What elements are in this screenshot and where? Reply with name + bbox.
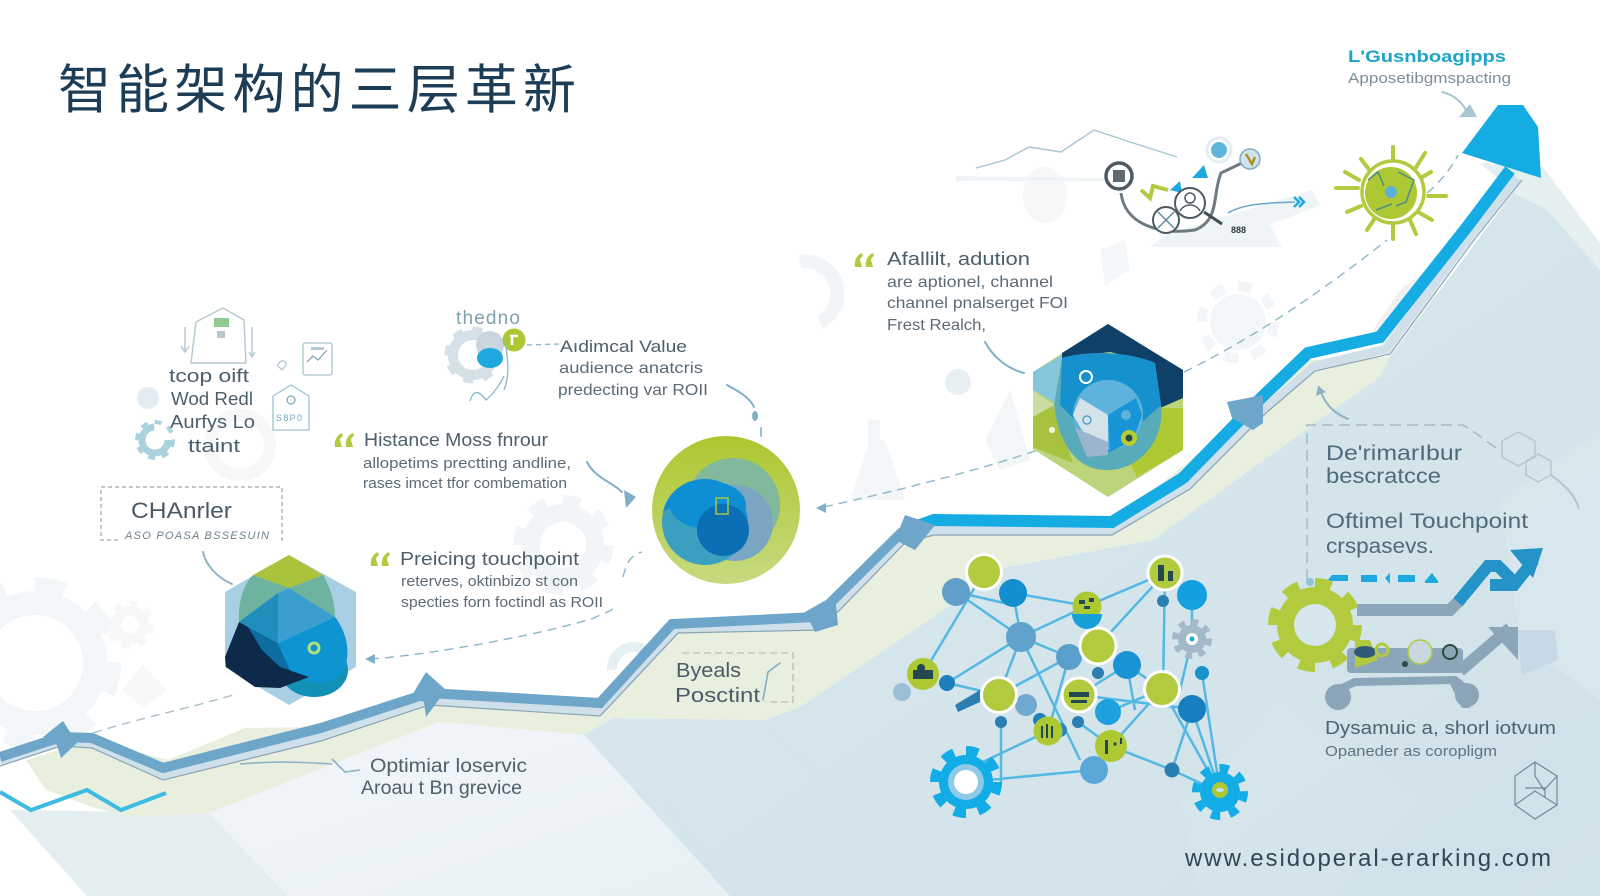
quote block: history: Histance Moss fnrour [364,430,548,450]
quote block: history: allopetims prectting andline, [363,455,571,472]
ghost gears background [0,167,1274,741]
arrow: label to head [1442,92,1477,117]
text block: optimiar: Optimiar loservic [370,756,527,777]
quote block: attribution [855,249,1068,334]
quote block: attribution: Frest Realch, [887,317,986,334]
arrow: audience to circle [727,385,761,436]
icon: hexagon logo [1515,762,1557,819]
text block: dynamic: Dysamuic a, shorl iotvum [1325,718,1556,738]
text block: beyond box: Posctint [675,685,761,707]
arrow: channel to hexagon [203,552,232,584]
gear: small blue [1196,768,1244,816]
quote block: pricing: reterves, oktinbizo st con [401,573,578,590]
left text block: tcop oift [169,366,249,386]
line marker 5 [1227,395,1263,430]
panel: right description: De'rimarIbur [1326,442,1462,465]
quote block: history [335,430,571,492]
left hexagon [225,555,356,705]
text block: audience [558,337,708,399]
title: 智能架构的三层革新 [58,61,576,120]
icon: price document: S8P0 [276,413,302,423]
icon: compass [1153,207,1179,233]
text block: beyond box: Byeals [676,660,741,682]
icon: green virus sun [1336,147,1446,239]
icon: house document [181,308,255,363]
icon: target [1106,163,1132,189]
quote block: pricing: specties forn foctindl as ROII [401,594,603,611]
quote block: attribution: Afallilt, adution [887,249,1030,269]
quote block: pricing: Preicing touchpoint [400,549,579,569]
quote block: attribution: channel pnalserget FOI [887,295,1068,312]
top right label [1348,47,1511,87]
icon: price document [273,385,309,430]
top right label: L'Gusnboagipps [1348,47,1506,66]
icon: quote [855,253,874,267]
line marker 3 [805,595,838,632]
icon: yellow bubble [1240,149,1260,169]
icon: quote [371,552,390,566]
icon cluster: mountain analytics: 888 [1231,225,1246,235]
left text block [169,366,255,456]
panel: channel box: ASO POASA BSSESUIN [124,530,269,542]
line marker 2 [411,672,446,717]
left text block: Wod Redl [171,389,253,409]
quote block: attribution: are aptionel, channel [887,274,1053,291]
green nodes white ring [966,554,1182,712]
quote block: pricing [371,549,603,611]
panel: left icons [137,308,332,458]
line marker 1 [43,721,77,758]
icon: person magnifier [1175,188,1205,218]
text block: dynamic: Opaneder as coropligm [1325,743,1497,760]
icon: lower trend arrow [1325,627,1558,710]
arrow: history to circle [587,462,636,508]
icon: blue bubble [1211,142,1227,158]
blue nodes [893,578,1209,784]
arrow: attribution to right hexagon [985,342,1024,373]
icon: small gear with pin [447,308,560,401]
panel: channel box: CHAnrler [131,498,232,523]
dashed link: left hexagon to line [93,695,233,733]
dashed link: sun to arrow [1427,155,1458,193]
icon: quote [335,433,354,447]
icon: partial gear [137,422,173,458]
green nodes plain [907,592,1127,762]
lower left blue line [0,790,166,810]
text block: dynamic [1325,718,1556,760]
line marker 4 [895,515,935,550]
icons on bar [1354,640,1457,667]
gear: grey [1175,622,1209,656]
text block: optimiar [240,756,527,799]
arrow: up to line [1316,386,1348,419]
panel: channel box [101,487,282,542]
icon: ghost circle [137,387,159,409]
icon: green gear [1273,578,1378,668]
icon: upper trend arrow [1357,548,1543,610]
icon: chart document [278,343,332,375]
network edges [923,572,1220,792]
dashed link: right hexagon to sun [1184,240,1387,372]
blue dashes [1327,573,1438,584]
panel: right description [1307,425,1579,584]
gear: large blue [935,751,997,813]
left text block: ttaint [188,436,240,456]
dashed link: pricing to left hexagon [365,552,642,664]
text block: optimiar: Aroau t Bn grevice [361,778,522,799]
text block: audience: predecting var ROII [558,382,708,399]
panel: right description: Oftimel Touchpoint [1326,510,1528,533]
quote block: history: rases imcet tfor combemation [363,475,567,492]
text block: audience: Aıdimcal Value [560,337,687,356]
arrow head [1462,105,1541,178]
top right label: Apposetibgmspacting [1348,70,1511,87]
text block: beyond box [675,653,793,707]
text block: audience: audience anatcris [559,360,703,377]
icon: small gear with pin: thedno [456,308,520,329]
right hexagon [1033,324,1183,497]
icon: hexagons [1502,432,1579,509]
center circle venn [652,436,800,584]
dashed link: right hexagon to center [816,449,1041,513]
node glyphs [913,565,1173,754]
trend arrow [1228,202,1295,213]
growth line [0,105,1541,780]
icon cluster: mountain analytics [956,130,1320,247]
network diagram [893,554,1244,816]
footer url: www.esidoperal-erarking.com [1184,845,1551,872]
panel: right description: crspasevs. [1326,535,1434,558]
left text block: Aurfys Lo [170,412,255,432]
panel: right description: bescratcce [1326,465,1441,488]
